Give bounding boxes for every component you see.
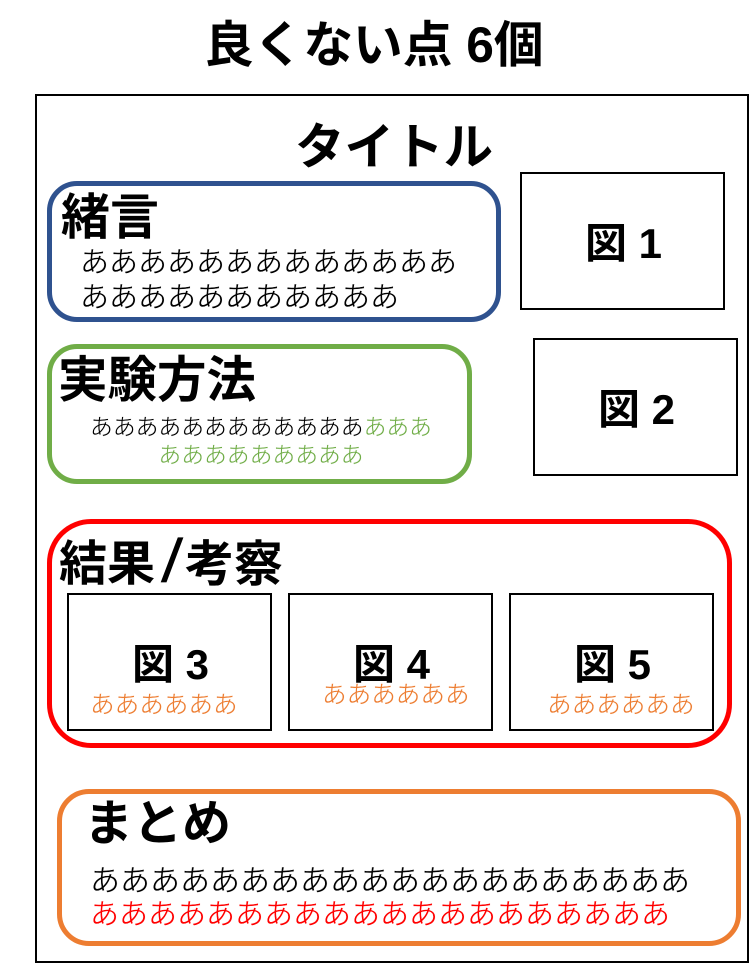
poster title: タイトル <box>295 120 493 175</box>
figure 5 label: 図 5 <box>574 641 651 688</box>
figure 5 <box>509 593 714 731</box>
heading: results and discussion: / <box>160 527 184 596</box>
panel: results and discussion <box>47 519 732 748</box>
figure 4 <box>288 593 493 731</box>
text: method body: あああああああああ <box>158 437 364 470</box>
figure 2 <box>533 338 738 476</box>
text: introduction body: ああああああああああああああああああああああああ <box>80 239 457 316</box>
figure 1 <box>520 172 725 310</box>
text: summary red line: ああああああああああああああああああああ <box>90 891 670 933</box>
text: method body: あああああああああああああああ <box>90 409 432 442</box>
heading: summary: まとめ <box>84 797 231 851</box>
figure 5 caption: ああああああ <box>547 685 695 721</box>
heading: results and discussion: 考察 <box>185 538 283 592</box>
panel: summary <box>57 789 741 946</box>
figure 4 caption: ああああああ <box>322 675 470 711</box>
figure 4 label: 図 4 <box>353 641 430 688</box>
figure 2 label: 図 2 <box>598 386 675 433</box>
figure 3 caption: ああああああ <box>90 685 238 721</box>
heading: results and discussion: 結果 <box>59 538 155 591</box>
figure 1 label: 図 1 <box>585 220 662 267</box>
heading: method: 実験方法 <box>58 353 256 408</box>
heading: results and discussion <box>59 527 283 596</box>
heading: introduction: 緒言 <box>61 191 159 245</box>
text: method body <box>90 409 432 470</box>
figure 3 label: 図 3 <box>132 641 209 688</box>
title: 良くない点 6個 <box>204 17 544 73</box>
panel: introduction <box>47 181 501 322</box>
text: summary black line: ああああああああああああああああああああ <box>90 856 690 900</box>
panel: method <box>47 344 472 484</box>
figure 3 <box>67 593 272 731</box>
